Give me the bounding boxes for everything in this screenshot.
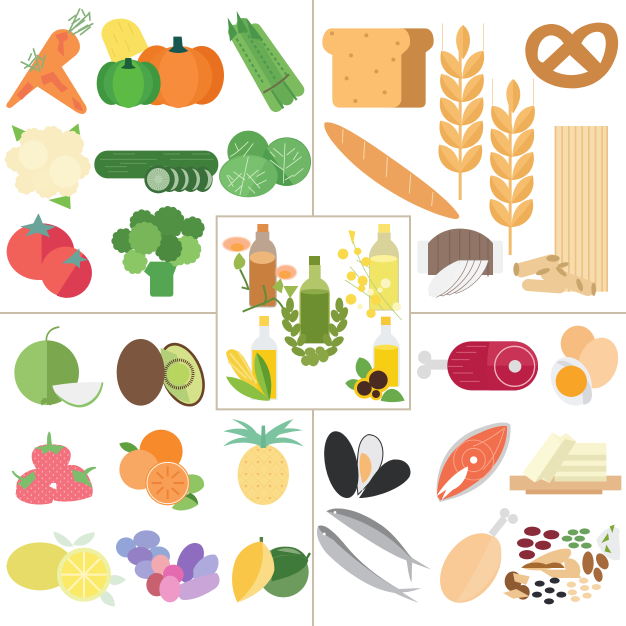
icon: butter [510, 432, 621, 494]
icon: yellow squash [101, 19, 149, 66]
icon: corn oil bottle [251, 316, 278, 400]
icon: safflower flowers [223, 237, 298, 313]
icon: strawberries [12, 431, 96, 505]
icon: orange pumpkin [135, 37, 224, 108]
icon: sunflower oil bottle [373, 317, 400, 387]
icon: eggs [543, 326, 625, 412]
icon: rapeseed oil bottle [369, 224, 399, 311]
icon: sunflowers [345, 357, 405, 402]
central frame [217, 216, 410, 409]
icon: penne pasta [513, 255, 596, 296]
icon: cucumber [94, 151, 218, 193]
icon: broccoli [115, 210, 201, 297]
icon: ham [417, 341, 538, 390]
icon: lemon [6, 531, 126, 606]
icon: beans and nuts [503, 525, 620, 604]
icon: cabbages [219, 131, 311, 197]
icon: guava [14, 327, 103, 407]
icon: salmon steak [436, 422, 511, 502]
icon: green pumpkin [97, 58, 161, 108]
icon: wheat ear left [439, 23, 484, 200]
icon: oranges [119, 430, 204, 510]
icon: tomatoes [7, 213, 92, 298]
icon: sardines [317, 508, 431, 603]
icon: carrots [6, 8, 93, 114]
panel: proteins [317, 326, 625, 614]
icon: mussels [319, 428, 411, 501]
icon: pineapple [223, 419, 303, 505]
icon: sliced bread [417, 229, 503, 298]
panel: fruits [6, 327, 310, 606]
icon: bread loaf [322, 28, 434, 108]
icon: asparagus [228, 11, 298, 108]
icon: mango [232, 537, 310, 602]
icon: rapeseed flowers [338, 230, 402, 320]
icon: chicken drumstick [427, 508, 518, 614]
icon: spaghetti pack [555, 126, 608, 292]
panel: grains [322, 23, 618, 298]
icon: safflower oil bottle [249, 224, 277, 307]
icon: olive oil bottle [299, 256, 330, 343]
icon: corn cob [226, 349, 271, 401]
icon: olive wreath [279, 298, 350, 366]
panel: oils [217, 216, 410, 409]
icon: cauliflower [9, 123, 87, 209]
icon: wheat ear right [490, 78, 535, 255]
icon: baguette [324, 122, 459, 219]
panel: vegetables [6, 8, 311, 298]
icon: pretzel [525, 23, 618, 88]
icon: berries [116, 530, 220, 602]
icon: kiwi [117, 336, 214, 413]
